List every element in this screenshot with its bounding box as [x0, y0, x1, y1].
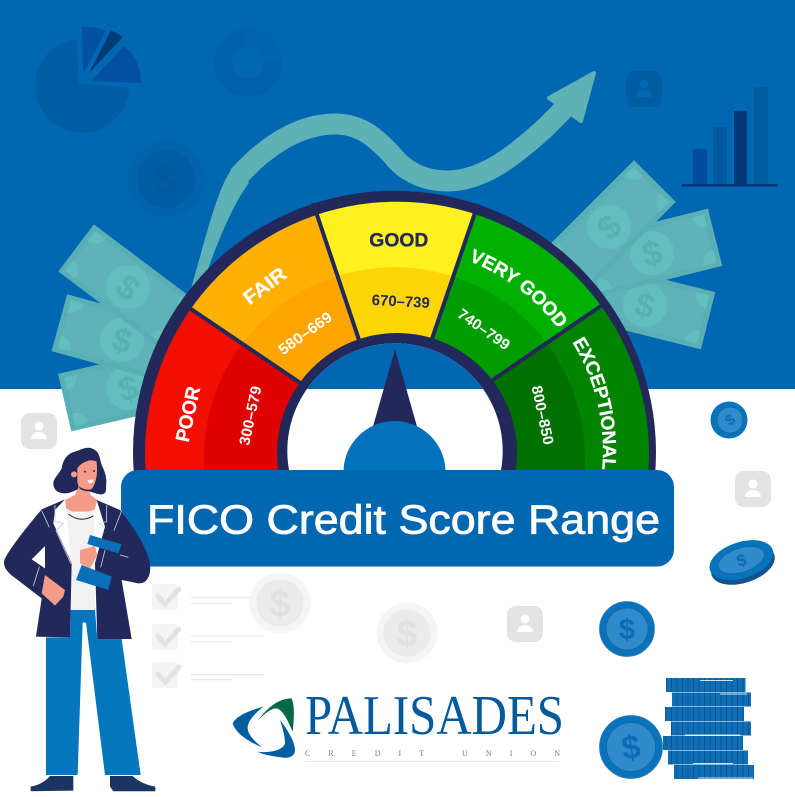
label EXCEPTIONAL: EXCEPTIONAL	[572, 336, 616, 470]
label GOOD: GOOD	[369, 230, 428, 252]
faded coin two: $	[397, 613, 418, 654]
hands	[42, 546, 97, 606]
blue coin large	[600, 716, 662, 778]
jacket trim	[33, 505, 128, 586]
left banknotes	[52, 224, 186, 432]
blue coin small: $	[722, 411, 739, 430]
blue coin medium: $	[619, 614, 635, 646]
needle	[372, 349, 418, 430]
folder	[76, 535, 122, 590]
title banner: FICO Credit Score Range	[147, 496, 660, 542]
rising arrow	[190, 73, 594, 292]
left shoe	[31, 776, 73, 791]
credit score gauge	[133, 190, 656, 471]
label FAIR: FAIR	[239, 263, 291, 310]
left banknotes: $	[108, 320, 136, 362]
hair	[53, 448, 106, 494]
jacket right	[95, 500, 150, 639]
faded coin one: $	[270, 583, 291, 624]
logo wordmark: PALISADES	[305, 685, 564, 747]
trousers	[46, 610, 141, 775]
range 800-850: 800–850	[528, 384, 557, 446]
eyes and chin shadow	[79, 470, 95, 491]
left banknotes: $	[115, 368, 142, 410]
person icon top	[626, 71, 662, 107]
faded coin one	[250, 572, 310, 634]
dark dollar coin	[128, 141, 204, 217]
shirt	[66, 508, 95, 610]
donut chart icon	[223, 37, 273, 88]
left banknotes: $	[108, 267, 146, 309]
label VERY GOOD: VERY GOOD	[473, 248, 566, 326]
blue coin large: $	[619, 727, 643, 767]
blue coin tilted: $	[734, 550, 749, 571]
ear	[71, 471, 77, 477]
range 300-579: 300–579	[236, 385, 265, 447]
woman holding folder	[4, 448, 155, 791]
blue coin tilted	[704, 533, 780, 592]
faded checklist	[152, 584, 264, 688]
right banknotes	[552, 160, 722, 350]
hub	[344, 421, 446, 470]
jacket left	[4, 499, 72, 637]
blue background	[0, 0, 795, 389]
title banner	[121, 470, 674, 566]
faded person icon left	[21, 413, 57, 449]
range 580-669: 580–669	[275, 309, 336, 359]
right shoe	[110, 776, 155, 791]
faded person icon right	[735, 471, 771, 507]
Palisades logo	[233, 685, 564, 762]
bar chart icon	[682, 87, 778, 187]
range 670-739: 670–739	[371, 292, 430, 312]
face and neck	[65, 460, 97, 512]
coin stack	[663, 678, 754, 779]
range 740-799: 740–799	[454, 306, 513, 354]
right banknotes: $	[638, 233, 666, 275]
pie chart icon	[35, 27, 141, 133]
blue coin small	[710, 402, 748, 438]
label POOR: POOR	[172, 385, 205, 444]
right banknotes: $	[631, 285, 659, 327]
faded coin two	[376, 602, 438, 664]
faded person icon center	[507, 606, 543, 642]
logo swoosh mark	[233, 698, 295, 758]
logo tagline: CREDIT UNION	[305, 749, 560, 758]
smile	[87, 479, 94, 483]
blue coin medium	[600, 602, 654, 656]
right banknotes: $	[590, 208, 630, 248]
dark dollar coin: $	[155, 158, 177, 202]
neckline	[68, 514, 93, 519]
